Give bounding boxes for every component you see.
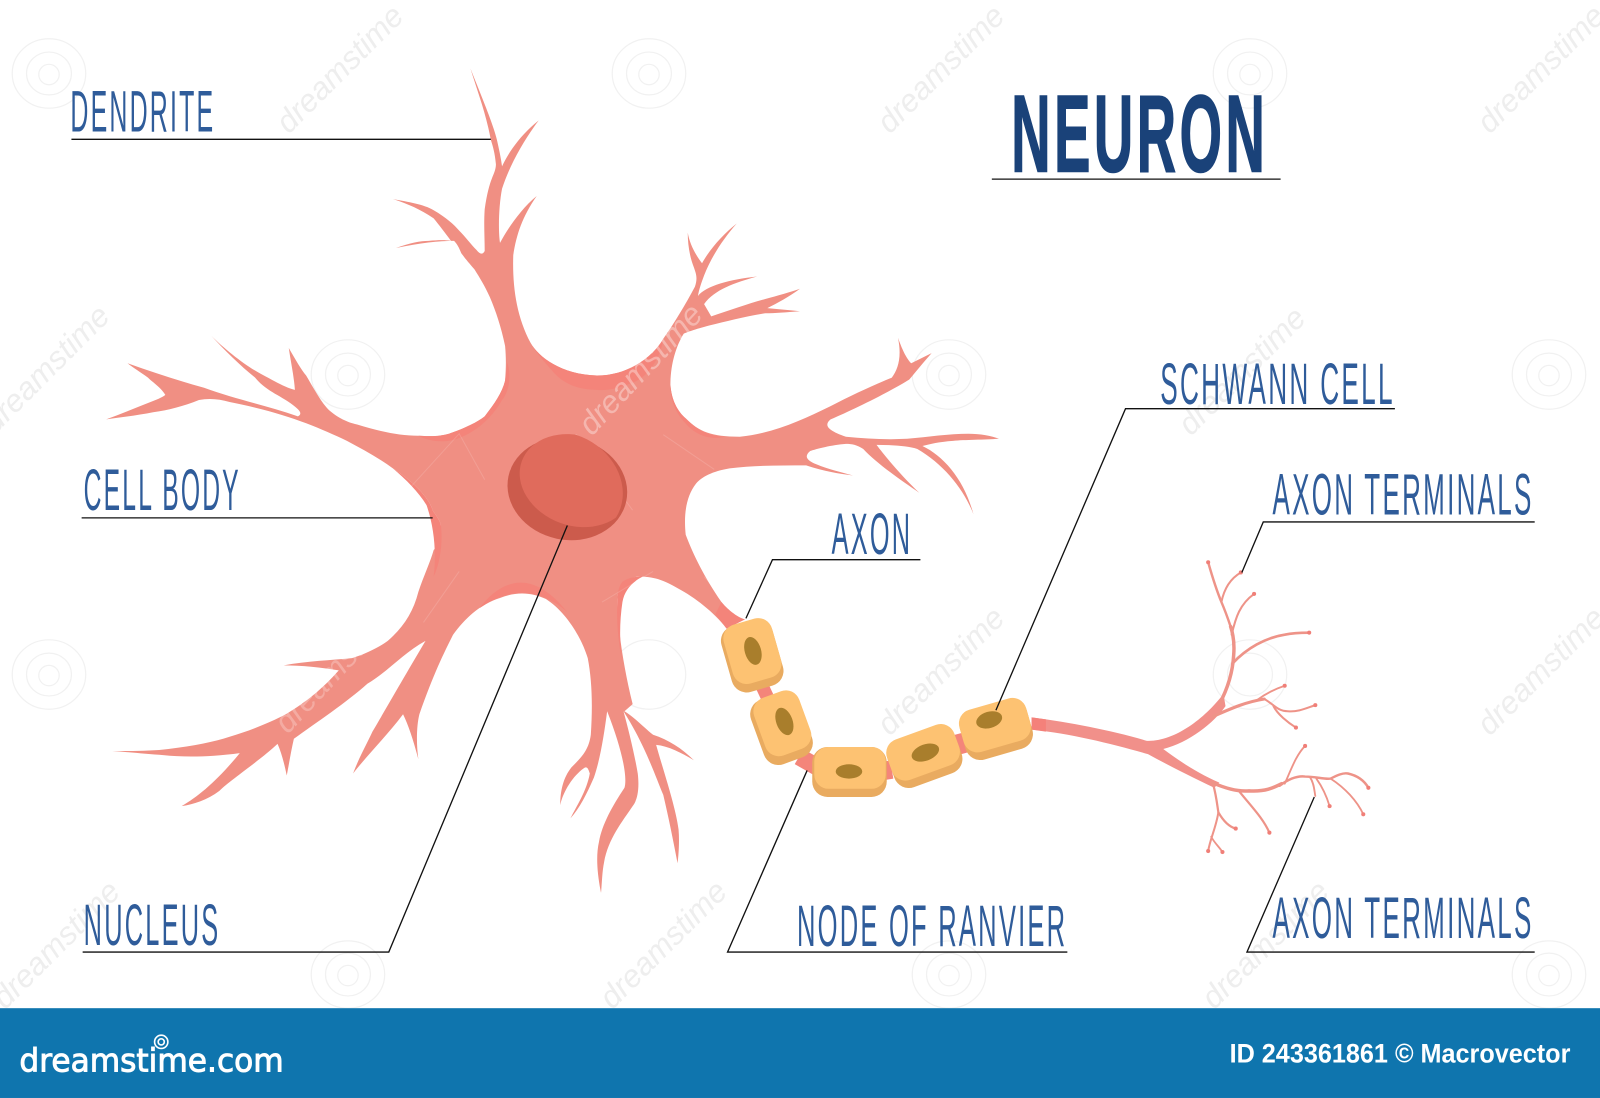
label: node of Ranvier	[728, 770, 1067, 959]
label: Schwann cell	[996, 352, 1395, 710]
watermark over cell	[267, 296, 735, 739]
watermark pattern: dreamstime	[1170, 299, 1313, 442]
schwann cell 2	[746, 686, 818, 769]
label: axon terminals upper	[1242, 462, 1535, 572]
label: axon terminals lower	[1247, 797, 1535, 952]
neuron cell body and dendrites	[106, 68, 999, 893]
label: nucleus: NUCLEUS	[84, 893, 220, 958]
label: cell body: CELL BODY	[84, 458, 241, 523]
footer banner	[0, 1008, 1600, 1098]
watermark pattern: dreamstime	[1194, 873, 1336, 1015]
watermark over cell: dreamstime	[267, 594, 406, 739]
schwann cell 3	[812, 747, 887, 797]
schwann cells	[717, 615, 1037, 797]
axon trunk and forks	[1032, 694, 1226, 788]
text: AXON	[832, 502, 912, 567]
nucleus	[508, 434, 628, 540]
cell silhouette	[106, 68, 999, 893]
text: NODE OF RANVIER	[797, 894, 1067, 959]
darker crescent shading	[393, 339, 745, 663]
watermark pattern: dreamstime	[268, 0, 411, 140]
axon fibre	[1032, 560, 1370, 854]
watermark pattern: dreamstime	[869, 0, 1012, 140]
watermark over cell: dreamstime	[571, 296, 710, 442]
icon: logo spiral	[155, 1035, 168, 1048]
schwann cell 5	[956, 695, 1037, 764]
title: Neuron: NEURON	[1011, 73, 1268, 195]
label: nucleus	[83, 526, 567, 958]
schwann cell 1	[717, 615, 787, 696]
footer logotype: dreamstime.com	[19, 1043, 284, 1079]
label: axon	[746, 502, 920, 618]
watermark pattern: dreamstime	[592, 873, 734, 1015]
image credit: ID 243361861 © Macrovector	[1230, 1038, 1570, 1068]
watermark pattern: dreamstime	[869, 599, 1012, 742]
label: dendrite: DENDRITE	[70, 80, 215, 145]
nodes of Ranvier	[754, 680, 968, 780]
schwann cell 4	[882, 720, 967, 792]
terminal boutons	[1206, 560, 1370, 854]
terminal branches	[1208, 562, 1368, 852]
